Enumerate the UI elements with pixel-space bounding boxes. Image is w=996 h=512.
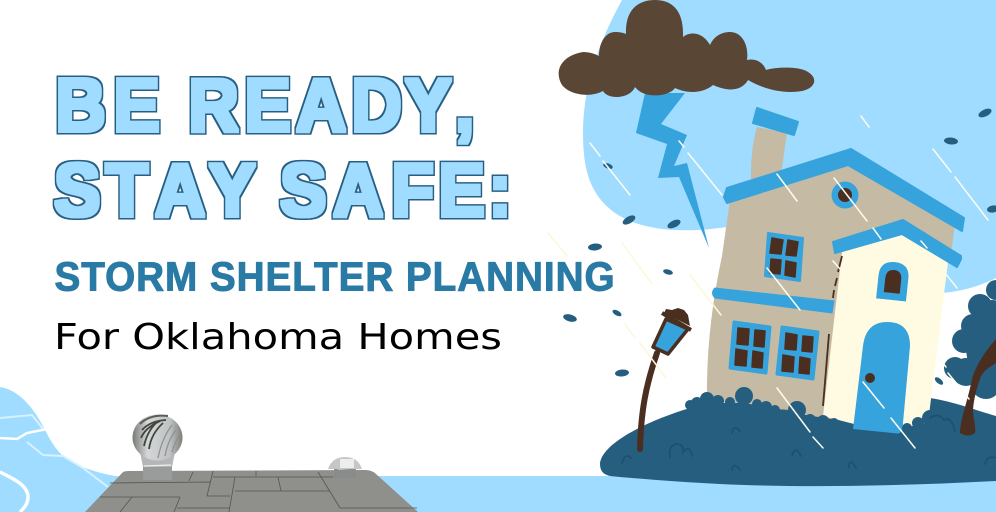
ground tufts <box>622 415 996 470</box>
annex roof <box>833 220 961 267</box>
title: BE READY, <box>55 64 474 148</box>
door <box>853 322 910 434</box>
roof slab with vents <box>85 414 418 512</box>
house <box>707 108 964 434</box>
chimney cap <box>753 108 798 135</box>
rain drops <box>562 107 996 386</box>
lower window left <box>730 322 770 373</box>
wall crack lines <box>823 256 842 406</box>
lower window right <box>777 327 818 379</box>
tree <box>944 280 996 436</box>
upper window <box>765 233 803 281</box>
annex wall <box>823 234 948 432</box>
bushes <box>685 387 960 440</box>
main wall <box>707 160 955 420</box>
main roof <box>724 149 964 231</box>
arched window <box>876 261 910 301</box>
round attic window <box>832 182 858 208</box>
bottom water band <box>375 476 996 512</box>
background sky blob <box>583 0 996 293</box>
lightning bolt <box>636 93 709 248</box>
tagline: For Oklahoma Homes <box>54 317 502 358</box>
blue band <box>712 288 834 313</box>
subtitle: STORM SHELTER PLANNING <box>54 254 616 300</box>
title: STAY SAFE: <box>54 149 512 233</box>
ground mound <box>600 398 996 486</box>
storm cloud <box>559 0 814 97</box>
pale rain streaks on white <box>548 233 721 378</box>
small vent <box>328 457 362 478</box>
bottom-left wave blob <box>0 387 125 512</box>
street lamp <box>640 308 691 449</box>
turbine vent <box>132 414 182 480</box>
chimney <box>751 127 787 185</box>
title <box>54 64 512 233</box>
white rain streaks <box>590 116 988 448</box>
